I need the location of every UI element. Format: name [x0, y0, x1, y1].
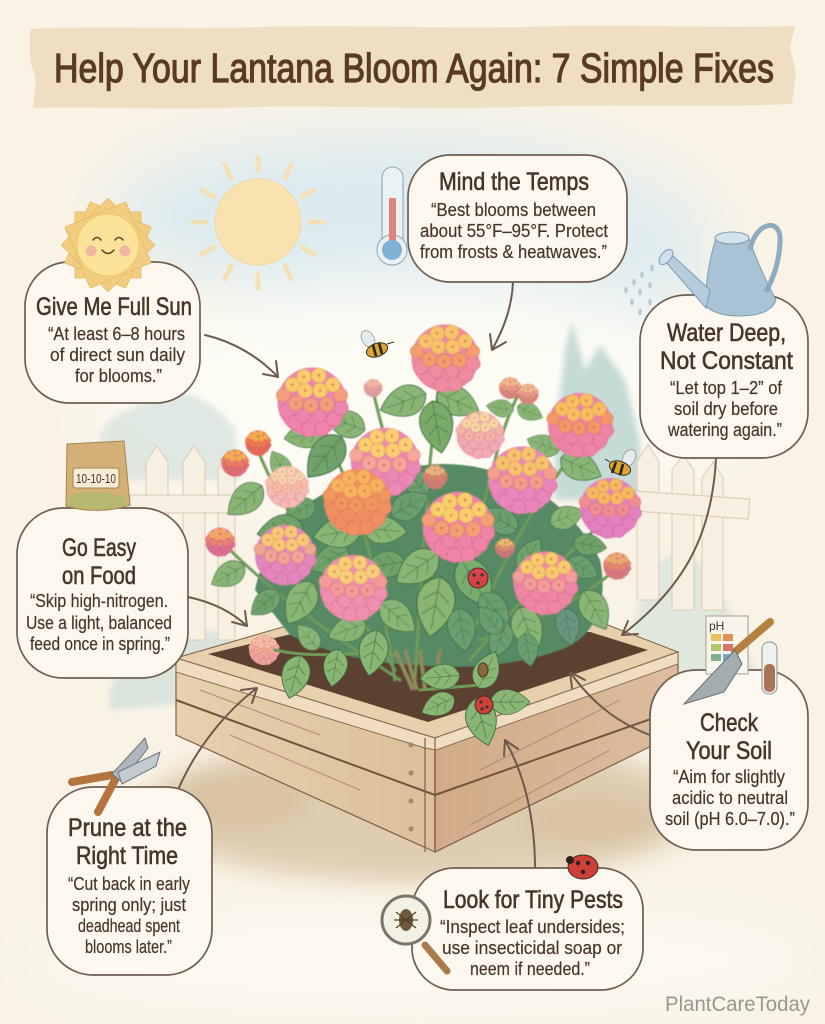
heading — [686, 709, 772, 765]
heading: Mind the Temps — [439, 168, 589, 196]
tip text: Use a light, balanced — [26, 613, 172, 633]
tip text: “Best blooms between — [431, 200, 596, 220]
bee right — [605, 447, 639, 478]
icon: ladybug — [566, 855, 598, 879]
heading: Not Constant — [660, 347, 793, 375]
tip text: soil dry before — [674, 399, 778, 419]
tip text: use insecticidal soap or — [442, 938, 622, 958]
ground — [140, 738, 700, 882]
tip text: of direct sun daily — [50, 345, 185, 365]
icon: smiling sun — [61, 198, 155, 292]
lantana plant — [205, 324, 642, 690]
stems — [225, 380, 615, 690]
tip text: spring only; just — [72, 895, 186, 915]
tip text: “Cut back in early — [68, 874, 190, 894]
soil — [208, 632, 648, 722]
icon: test tube — [762, 642, 777, 694]
icon: pruners — [72, 738, 160, 812]
tip text: from frosts & heatwaves.” — [420, 242, 607, 262]
tip text — [48, 324, 185, 386]
heading: on Food — [62, 562, 136, 590]
front sprig with ladybug — [417, 647, 530, 749]
spilling stem with pale flowers — [248, 628, 395, 702]
tip text — [26, 591, 172, 654]
arrow: water — [622, 458, 716, 635]
icon: large sun — [193, 157, 324, 288]
heading: Check — [700, 709, 758, 737]
tip text: neem if needed.” — [470, 959, 590, 979]
ladybug on sprig — [475, 696, 493, 714]
left bed panel — [176, 658, 435, 852]
icon: fertilizer bag: 10-10-10 — [76, 471, 116, 486]
heading: Go Easy — [62, 534, 136, 562]
heading: Water Deep, — [667, 319, 786, 347]
bug on leaf — [478, 663, 488, 677]
icon: water drops — [624, 265, 654, 315]
watermark: PlantCareToday — [665, 993, 810, 1016]
panel: check your soil — [650, 616, 808, 850]
bee top — [358, 328, 394, 360]
heading: Look for Tiny Pests — [443, 886, 623, 914]
icon: magnifier with bug — [382, 896, 447, 971]
ladybug on leaf — [468, 568, 488, 588]
icon: trowel — [684, 622, 770, 704]
tip text: “Aim for slightly — [673, 767, 785, 787]
tip text: “Skip high-nitrogen. — [30, 591, 168, 611]
tip text: about 55°F–95°F. Protect — [420, 221, 608, 241]
tip text — [420, 200, 608, 262]
icon: thermometer — [377, 167, 407, 265]
tip text: blooms later.” — [85, 937, 172, 957]
panel: mind the temps — [377, 155, 627, 282]
panel: prune at the right time — [47, 738, 212, 975]
heading — [660, 319, 793, 375]
tip text: “At least 6–8 hours — [48, 324, 185, 344]
tip text: soil (pH 6.0–7.0).” — [665, 809, 795, 829]
arrow: food — [188, 597, 247, 626]
raised wooden bed — [176, 622, 678, 852]
panel: go easy on food — [17, 441, 188, 678]
tip text — [665, 767, 795, 829]
title banner — [30, 26, 796, 109]
panel: water deep — [624, 225, 808, 458]
tip text: watering again.” — [667, 420, 782, 440]
heading: Your Soil — [686, 737, 772, 765]
leaves — [206, 379, 618, 668]
arrow: prune — [178, 688, 257, 790]
heading — [62, 534, 136, 590]
right bed panel — [435, 652, 678, 852]
icon: fertilizer bag — [66, 441, 130, 510]
tip text: “Inspect leaf undersides; — [440, 917, 625, 937]
heading: Right Time — [76, 842, 178, 870]
bed back rim — [176, 622, 678, 738]
arrow: full sun — [205, 335, 278, 377]
heading: Give Me Full Sun — [36, 293, 192, 321]
tip text — [440, 917, 625, 979]
icon: watering can — [656, 225, 780, 316]
arrow: temps — [490, 282, 513, 350]
arrow: pests — [504, 740, 535, 868]
arrow: soil — [570, 672, 650, 735]
icon: pH chart: pH — [709, 619, 724, 633]
tip text — [667, 378, 783, 440]
background trees — [100, 322, 760, 710]
picket fence — [130, 444, 750, 640]
heading: Prune at the — [68, 814, 187, 842]
icon: pH chart — [706, 616, 748, 674]
tip text: “Let top 1–2” of — [670, 378, 783, 398]
tip text: acidic to neutral — [672, 788, 788, 808]
lantana flower clusters — [205, 324, 642, 622]
tip text — [68, 874, 190, 957]
panel: give me full sun — [25, 198, 200, 403]
tip text: deadhead spent — [78, 916, 180, 936]
tip text: for blooms.” — [75, 366, 162, 386]
foliage mass — [255, 464, 603, 667]
heading — [68, 814, 187, 870]
rim and plank lines — [176, 652, 678, 852]
panel: look for tiny pests — [382, 855, 643, 990]
tip text: feed once in spring.” — [30, 634, 170, 654]
